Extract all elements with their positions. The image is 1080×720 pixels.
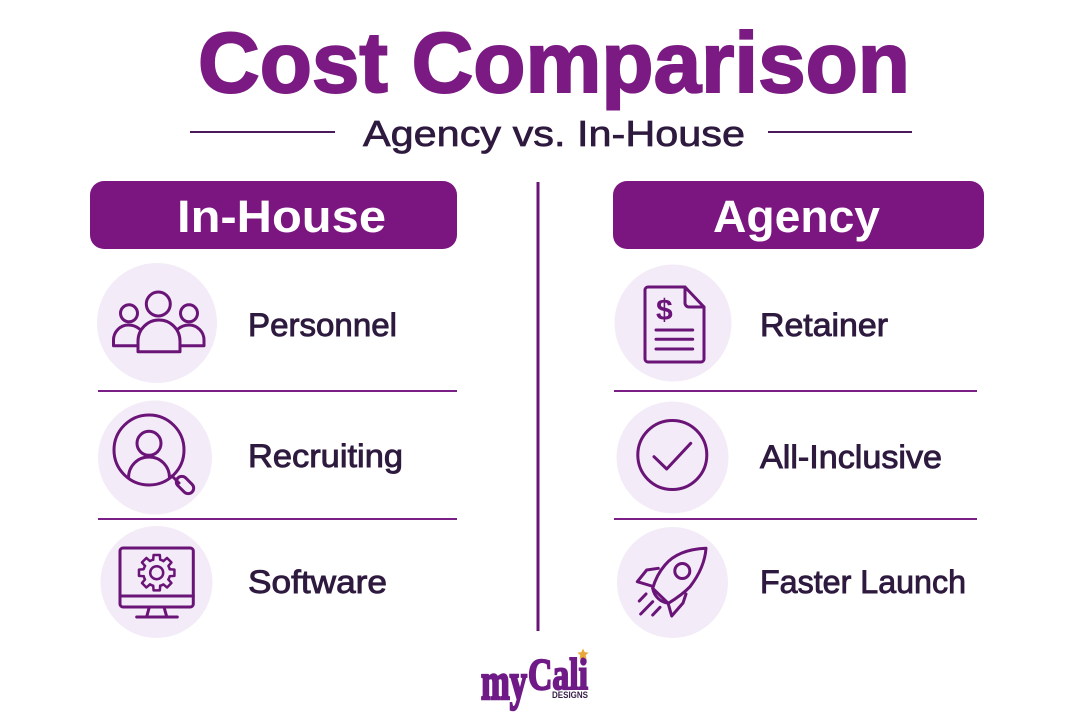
icon: invoice: $ [656,294,673,327]
icon: monitor gear [120,548,193,617]
row: retainer [614,264,888,382]
row: faster launch [617,527,966,638]
heading: agency [613,181,984,249]
icon: star [577,648,589,659]
heading: in-house: In-House [177,191,386,242]
center divider [536,182,540,631]
label: software: Software [248,564,387,600]
row: all-inclusive [616,402,942,514]
row: software [100,526,387,638]
icon: people [114,292,204,352]
label: all-inclusive: All-Inclusive [760,439,942,475]
label: personnel: Personnel [248,307,397,343]
logo: DESIGNS [552,690,588,700]
icon: rocket [637,548,706,616]
icon: magnifier person [114,415,196,496]
icon: invoice [645,287,704,362]
subtitle: Agency vs. In-House [363,113,745,154]
icon: check circle [638,420,707,490]
label: recruiting: Recruiting [248,438,403,474]
label: faster launch: Faster Launch [760,564,966,600]
label: retainer: Retainer [760,307,888,343]
logo: my [481,654,527,711]
row: personnel [97,263,397,383]
row: recruiting [98,400,403,514]
logo: Cali [528,650,588,699]
logo [481,648,589,711]
panel: agency [613,181,984,638]
heading: agency: Agency [713,191,880,242]
panel: in-house [90,181,457,638]
title: Cost Comparison [198,16,910,111]
heading: in-house [90,181,457,249]
